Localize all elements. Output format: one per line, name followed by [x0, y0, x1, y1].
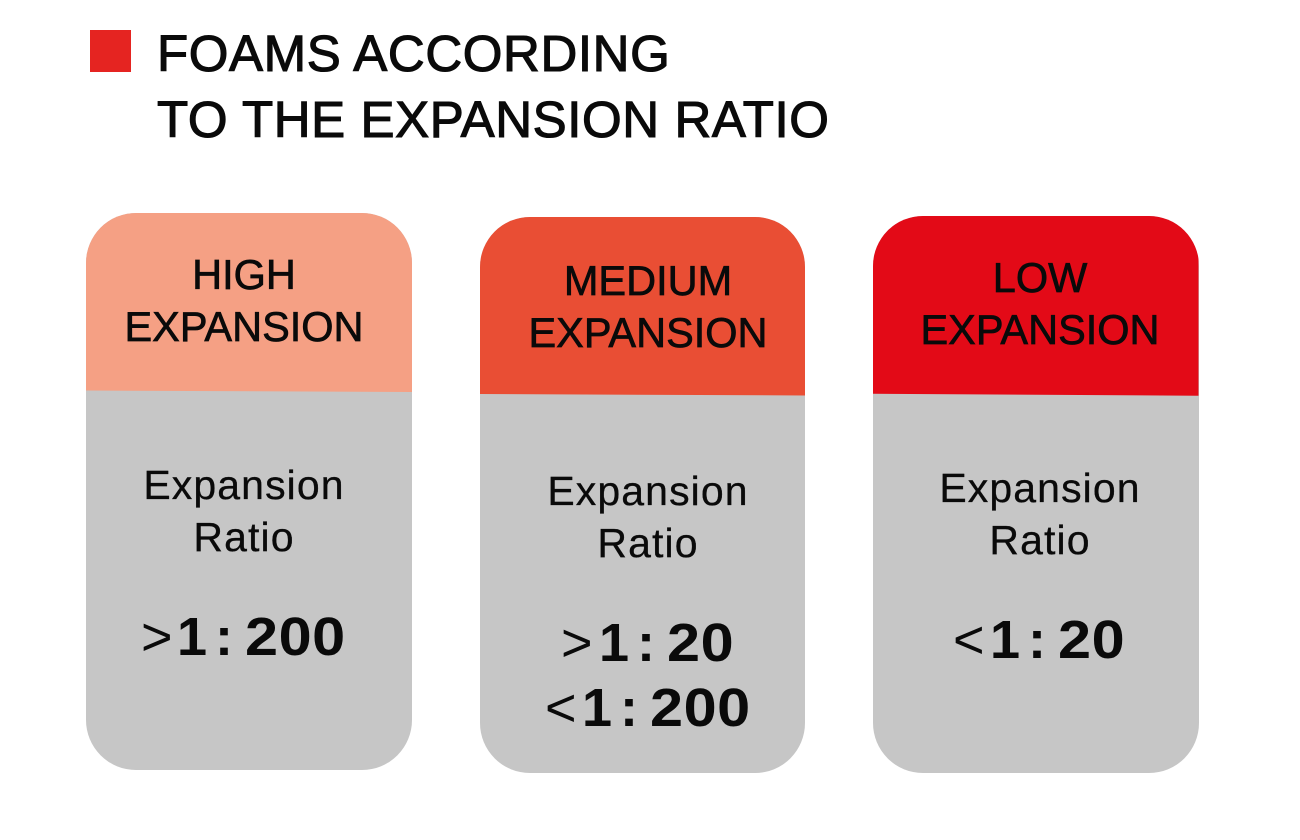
value: less than 1:200: [545, 678, 751, 738]
title: [157, 25, 830, 148]
value: less than 1:200: :: [620, 678, 638, 738]
value: greater than 1:20: 1: [599, 613, 629, 673]
label: expansion ratio: Ratio: [989, 517, 1091, 563]
value: less than 1:20: [953, 610, 1125, 670]
panel: low expansion: [873, 216, 1198, 773]
label: expansion ratio: [143, 462, 345, 560]
heading: high expansion: EXPANSION: [124, 303, 364, 350]
heading: high expansion: HIGH: [192, 251, 296, 298]
heading: low expansion: EXPANSION: [920, 306, 1160, 353]
header: low expansion: [873, 216, 1198, 406]
title marker: red square: [90, 30, 131, 72]
label: expansion ratio: Ratio: [597, 520, 699, 566]
value: greater than 1:200: >: [141, 607, 173, 667]
label: expansion ratio: [547, 468, 749, 566]
value: greater than 1:20: :: [637, 613, 655, 673]
value: less than 1:20: 1: [990, 610, 1020, 670]
value: greater than 1:20: 20: [667, 613, 734, 673]
panel: high expansion: [86, 213, 412, 770]
value: greater than 1:200: 200: [245, 607, 346, 667]
value: greater than 1:200: [141, 607, 346, 667]
heading: low expansion: LOW: [993, 254, 1087, 301]
heading: high expansion: [124, 251, 364, 350]
value: less than 1:200: 200: [650, 678, 751, 738]
value: less than 1:20: :: [1028, 610, 1046, 670]
value: greater than 1:200: :: [215, 607, 233, 667]
value: greater than 1:20: >: [561, 613, 593, 673]
panel: medium expansion: [480, 217, 805, 773]
label: expansion ratio: Expansion: [939, 465, 1141, 511]
heading: low expansion: [920, 254, 1160, 353]
header: high expansion: [86, 213, 412, 403]
value: greater than 1:200: 1: [177, 607, 207, 667]
title: FOAMS ACCORDING: [157, 25, 670, 82]
heading: medium expansion: [528, 257, 768, 356]
label: expansion ratio: Ratio: [193, 514, 295, 560]
value: less than 1:200: 1: [582, 678, 612, 738]
heading: medium expansion: EXPANSION: [528, 309, 768, 356]
value: less than 1:20: <: [953, 610, 985, 670]
label: expansion ratio: [939, 465, 1141, 563]
header: medium expansion: [480, 217, 805, 407]
title: TO THE EXPANSION RATIO: [157, 90, 830, 148]
value: greater than 1:20: [561, 613, 734, 673]
label: expansion ratio: Expansion: [547, 468, 749, 514]
value: less than 1:20: 20: [1058, 610, 1125, 670]
heading: medium expansion: MEDIUM: [564, 257, 732, 304]
label: expansion ratio: Expansion: [143, 462, 345, 508]
value: less than 1:200: <: [545, 678, 577, 738]
